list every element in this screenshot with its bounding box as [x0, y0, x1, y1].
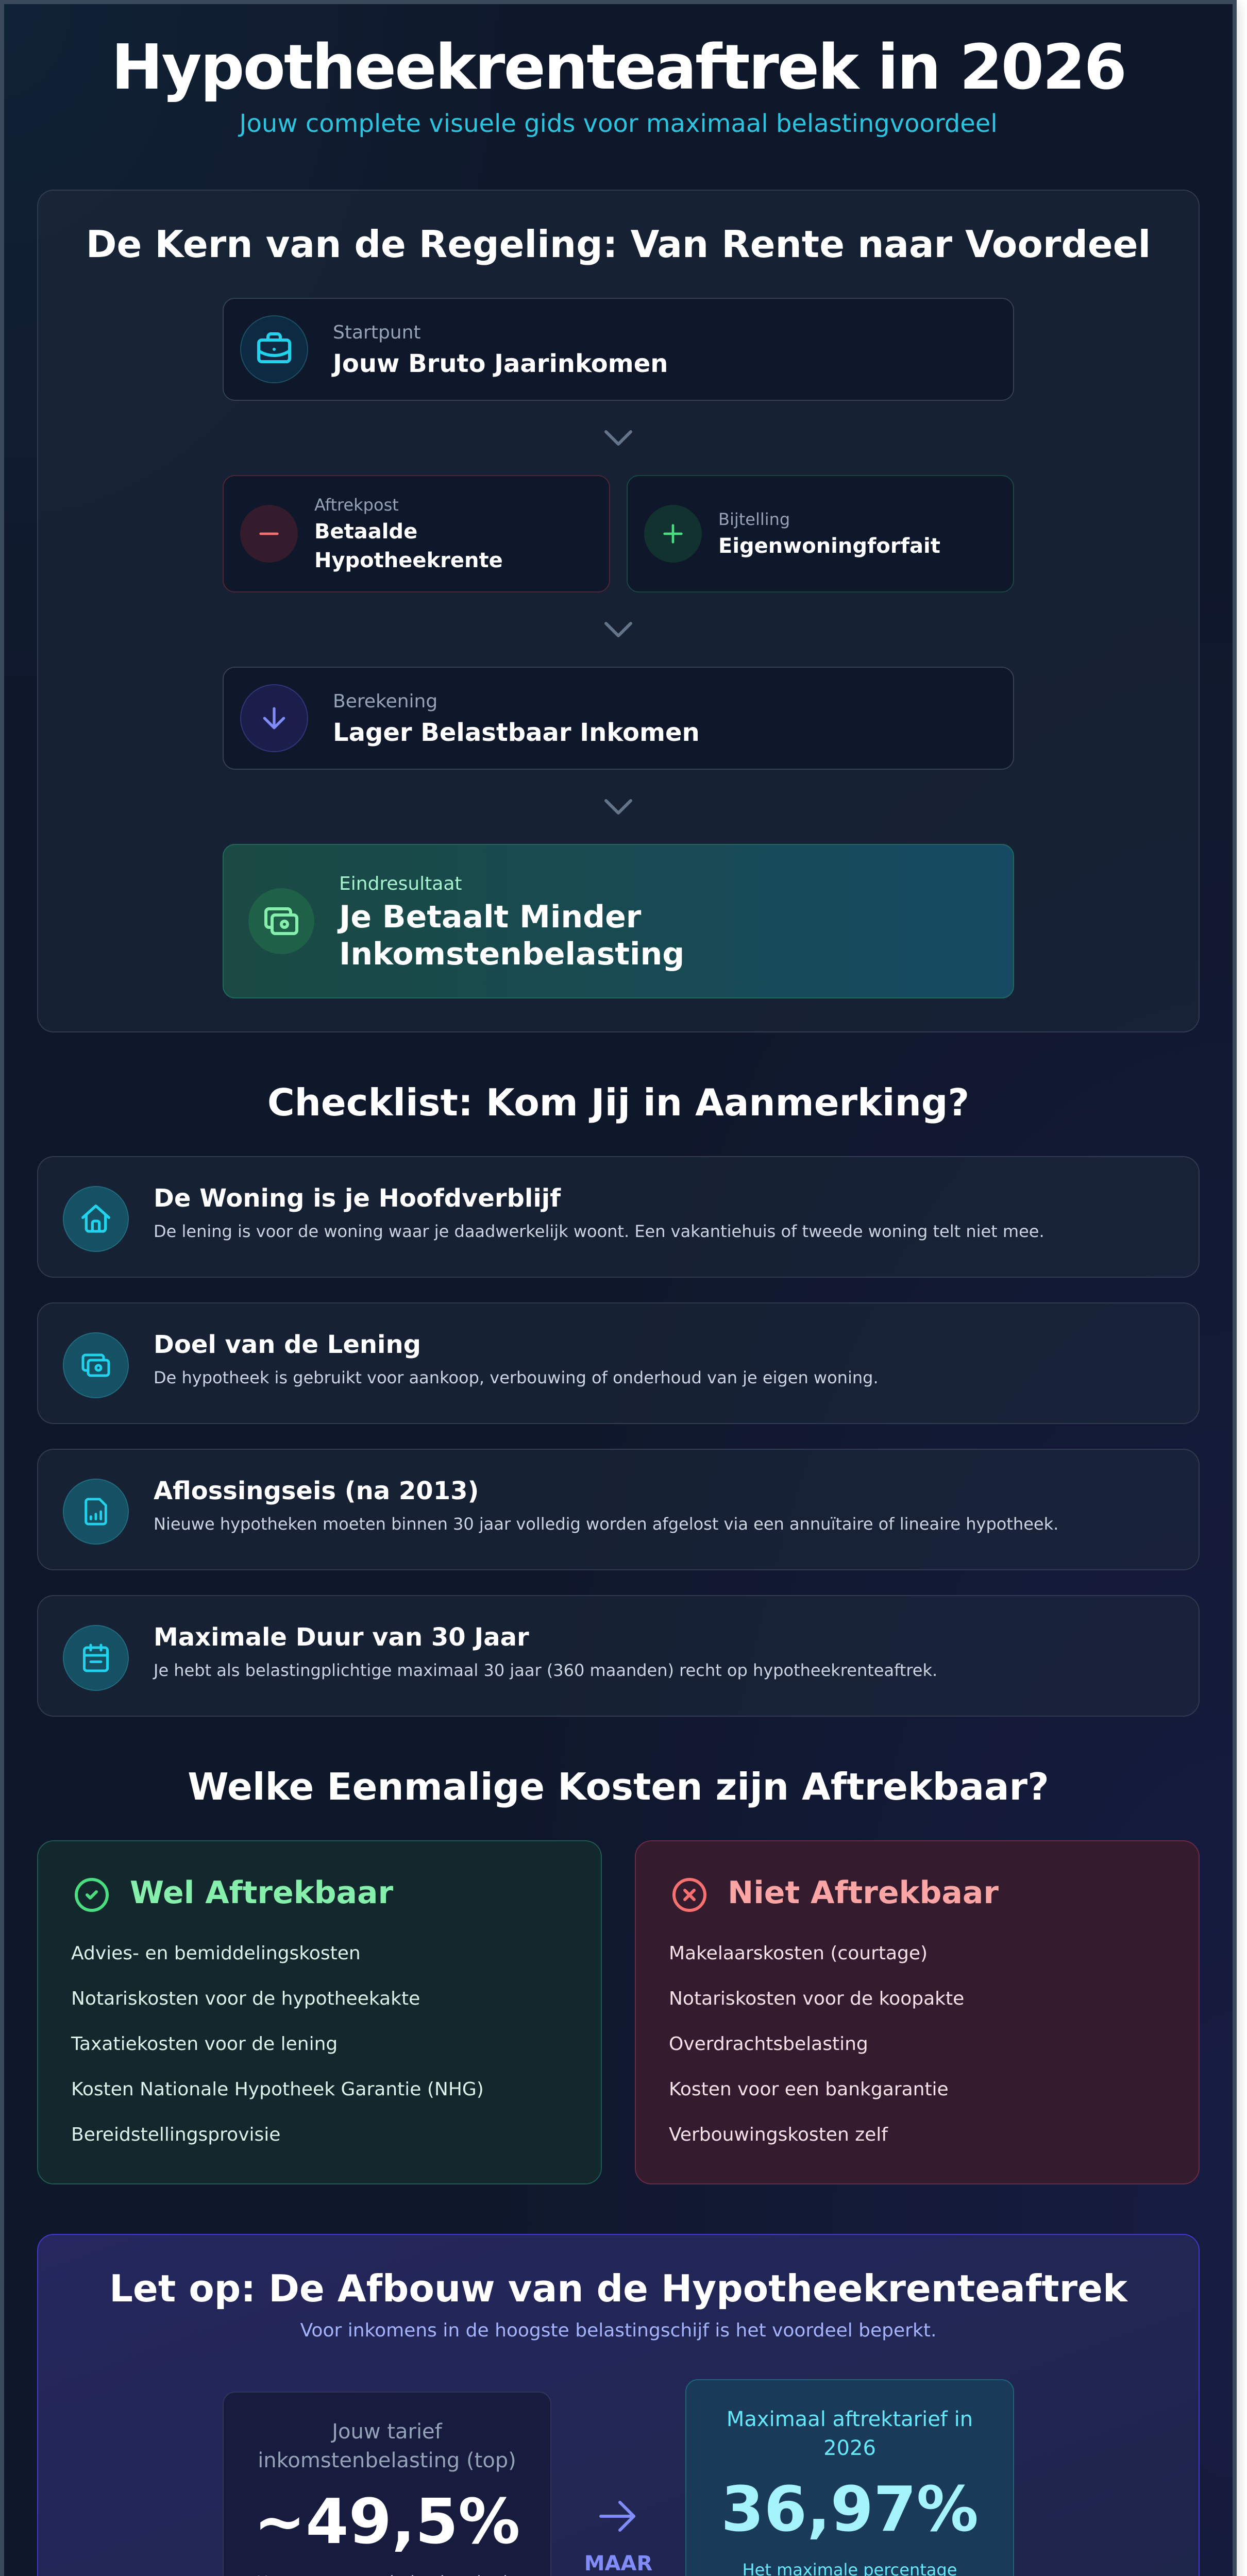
arrow: chevron	[604, 430, 632, 446]
step text: startpunt: Startpunt	[333, 322, 421, 343]
list: niet aftrekbaar: Kosten voor een bankgarantie	[669, 2079, 949, 2100]
step text: berekening	[333, 691, 700, 747]
heading: checklist: Checklist: Kom Jij in Aanmerking?	[267, 1081, 969, 1124]
item text: hoofdverblijf	[154, 1184, 1044, 1241]
item text: aflossingseis	[154, 1477, 1058, 1534]
list: wel aftrekbaar: Bereidstellingsprovisie	[71, 2124, 280, 2145]
item text: hoofdverblijf: De Woning is je Hoofdverblijf	[154, 1184, 561, 1213]
number: 36,97%: 36,97%	[721, 2474, 979, 2546]
step text: eindresultaat: Eindresultaat	[339, 873, 462, 894]
subheading: afbouw: Voor inkomens in de hoogste belastingschijf is het voordeel beperkt.	[300, 2320, 936, 2341]
step: eindresultaat	[223, 844, 1014, 998]
step text: berekening: Lager Belastbaar Inkomen	[333, 718, 700, 747]
subtitle: Jouw complete visuele gids voor maximaal belastingvoordeel	[239, 109, 998, 138]
panel: wel aftrekbaar	[37, 1840, 602, 2184]
list: niet aftrekbaar	[669, 1939, 964, 2166]
list: niet aftrekbaar: Notariskosten voor de koopakte	[669, 1988, 964, 2009]
step text: eindresultaat: Inkomstenbelasting	[339, 936, 684, 972]
flow diagram	[223, 298, 1014, 998]
checklist item: hoofdverblijf	[37, 1156, 1200, 1278]
item text: aflossingseis: Aflossingseis (na 2013)	[154, 1477, 479, 1505]
icon: minus	[240, 505, 298, 563]
list: wel aftrekbaar: Taxatiekosten voor de lening	[71, 2033, 338, 2055]
step text: bijtelling	[718, 510, 940, 558]
list: niet aftrekbaar: Makelaarskosten (courtage)	[669, 1943, 928, 1964]
icon: arrow down	[240, 684, 308, 752]
arrow: chevron	[604, 622, 632, 637]
icon: briefcase	[240, 315, 308, 383]
number: 49,5%: ~49,5%	[254, 2486, 520, 2558]
step text: berekening: Berekening	[333, 691, 437, 712]
step text: bijtelling: Bijtelling	[718, 510, 790, 529]
item text: hoofdverblijf: De lening is voor de woning waar je daadwerkelijk woont. Een vakantiehuis of tweede woning telt niet mee.	[154, 1222, 1044, 1241]
checklist item: duur	[37, 1595, 1200, 1717]
icon: file chart	[63, 1479, 129, 1545]
card: jouw tarief	[223, 2392, 551, 2576]
label: maximaal aftrektarief: Maximaal aftrektarief in 2026	[727, 2408, 973, 2460]
icon: plus	[644, 505, 702, 563]
item text: doel: Doel van de Lening	[154, 1330, 421, 1359]
checklist item: aflossingseis	[37, 1449, 1200, 1570]
heading: afbouw: Let op: De Afbouw van de Hypotheekrenteaftrek	[109, 2267, 1127, 2310]
item text: doel	[154, 1330, 879, 1387]
list: wel aftrekbaar: Notariskosten voor de hypotheekakte	[71, 1988, 420, 2009]
step text: aftrekpost: Aftrekpost	[314, 495, 399, 515]
panel: let op afbouw	[37, 2234, 1200, 2576]
icon: x circle	[671, 1876, 708, 1913]
heading: eenmalige kosten: Welke Eenmalige Kosten zijn Aftrekbaar?	[188, 1765, 1049, 1808]
label: jouw tarief: Jouw tarief inkomstenbelasting (top)	[258, 2420, 516, 2472]
item text: aflossingseis: Nieuwe hypotheken moeten binnen 30 jaar volledig worden afgelost via een annuïtaire of lineaire hypotheek.	[154, 1514, 1058, 1534]
list: wel aftrekbaar: Kosten Nationale Hypotheek Garantie (NHG)	[71, 2079, 484, 2100]
step: berekening	[223, 667, 1014, 770]
panel: de kern van de regeling	[37, 190, 1200, 1032]
row: aftrekpost en bijtelling	[223, 475, 1014, 592]
icon: money	[248, 888, 314, 954]
label: maar: MAAR	[584, 2552, 652, 2575]
step text: aftrekpost: Hypotheekrente	[314, 549, 503, 572]
card: maximaal aftrektarief	[685, 2379, 1014, 2576]
list: wel aftrekbaar: Advies- en bemiddelingskosten	[71, 1943, 361, 1964]
arrow: maar	[598, 2499, 639, 2534]
arrow: chevron	[604, 799, 632, 815]
item text: duur	[154, 1621, 937, 1683]
step text: bijtelling: Eigenwoningforfait	[718, 534, 940, 558]
step text: startpunt: Jouw Bruto Jaarinkomen	[333, 349, 668, 378]
step: bijtelling	[627, 475, 1014, 592]
item text: doel: De hypotheek is gebruikt voor aankoop, verbouwing of onderhoud van je eigen woning.	[154, 1368, 879, 1387]
step text: eindresultaat: Je Betaalt Minder	[339, 899, 641, 935]
item text: duur: Je hebt als belastingplichtige maximaal 30 jaar (360 maanden) recht op hypotheekrenteaftrek.	[154, 1660, 937, 1680]
heading: kern: De Kern van de Regeling: Van Rente naar Voordeel	[86, 223, 1151, 266]
list: wel aftrekbaar	[71, 1939, 484, 2166]
title: Hypotheekrenteaftrek in 2026	[111, 32, 1125, 104]
step text: aftrekpost	[314, 495, 503, 572]
icon: house	[63, 1186, 129, 1252]
icon: check circle	[73, 1876, 110, 1913]
list: niet aftrekbaar: Overdrachtsbelasting	[669, 2033, 868, 2055]
icon: money	[63, 1332, 129, 1398]
item text: duur: Maximale Duur van 30 Jaar	[154, 1623, 529, 1652]
icon: calendar	[63, 1625, 129, 1691]
step text: eindresultaat	[337, 873, 684, 972]
checklist item: doel	[37, 1302, 1200, 1424]
step text: startpunt	[331, 322, 668, 378]
panel: niet aftrekbaar	[635, 1840, 1200, 2184]
list: niet aftrekbaar: Verbouwingskosten zelf	[669, 2124, 888, 2145]
heading: niet aftrekbaar: Niet Aftrekbaar	[728, 1875, 999, 1911]
step: startpunt	[223, 298, 1014, 401]
heading: wel aftrekbaar: Wel Aftrekbaar	[130, 1875, 393, 1911]
step: aftrekpost	[223, 475, 610, 592]
step text: aftrekpost: Betaalde	[314, 520, 417, 544]
